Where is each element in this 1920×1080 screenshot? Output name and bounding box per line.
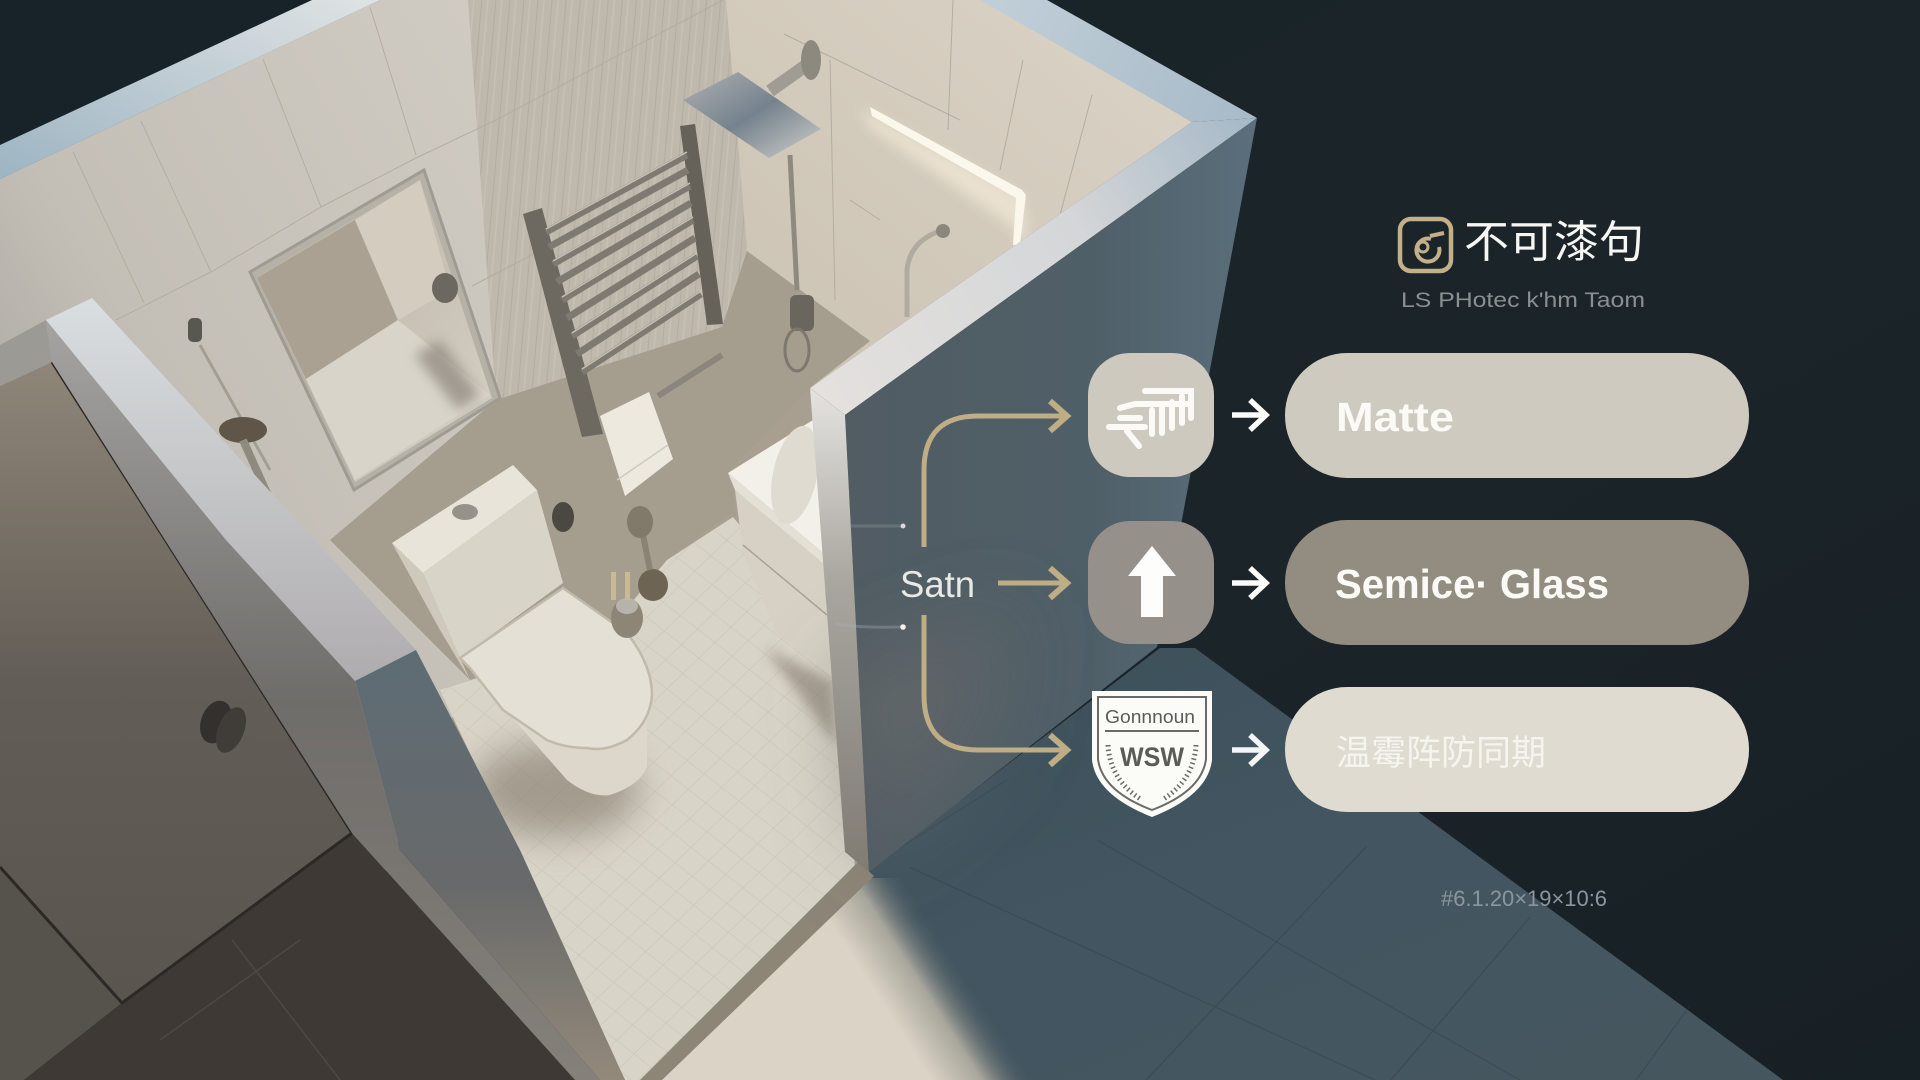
wall face: [845, 118, 1257, 872]
photo: outer floor: [640, 648, 1783, 1080]
vanity: [728, 420, 833, 677]
wall end: [810, 388, 869, 872]
photo: top wall cap: [0, 0, 380, 179]
white arrow 2: [1232, 568, 1266, 598]
pill: matte: Matte: [1336, 394, 1454, 440]
subtitle: LS PHotec k'hm Taom: [1401, 289, 1645, 312]
light slot: [860, 107, 1030, 250]
wall hook and brush: [188, 318, 270, 500]
mirror: [250, 170, 500, 490]
striped feature wall: [468, 0, 747, 400]
icon: up arrow: [1088, 521, 1214, 644]
icon: certification shield: WSW: [1120, 742, 1184, 772]
photo: bathroom interior: [0, 0, 1192, 1080]
icon: paint logo: [1400, 219, 1451, 271]
pill: semi-gloss: [1285, 520, 1749, 645]
towel rail: [523, 124, 723, 437]
lit floor patch: [640, 878, 1040, 1080]
toilet brush and cup: [552, 502, 668, 638]
shower set: [683, 40, 950, 371]
photo: left partition: [46, 298, 625, 1080]
pill: mold resistance: [1285, 687, 1749, 812]
right tiled wall: [726, 0, 1192, 388]
white arrow 3: [1232, 735, 1266, 765]
tile grout lines: [73, 0, 1092, 320]
white arrow 1: [1232, 400, 1266, 430]
lower wall: [330, 251, 870, 680]
door handle: [194, 696, 252, 757]
photo: right wall: [810, 0, 1257, 872]
inner floor: [440, 517, 855, 1080]
pill: mold resistance: 温霉阵防同期: [1336, 734, 1546, 773]
wall cap: [810, 0, 1257, 415]
toilet: [392, 465, 652, 795]
icon: certification shield: Gonnnoun: [1105, 707, 1195, 727]
floor shadows: [470, 648, 836, 838]
footer dimensions: #6.1.20×19×10:6: [1441, 886, 1607, 911]
left tiled wall: [0, 0, 600, 1000]
threshold: [640, 862, 874, 1080]
diagram source label: Satn: [900, 564, 975, 605]
photo: door and left floor: [0, 320, 575, 1080]
gold arrow: to matte: [924, 401, 1067, 547]
gold arrow: to mold resistance: [924, 615, 1067, 765]
pill: semi-gloss: Semice· Glass: [1335, 561, 1609, 607]
title text: 不可漆句: [1464, 218, 1644, 267]
callout dots: [835, 524, 906, 630]
gold arrow: to semi-gloss: [998, 568, 1067, 598]
title group: [1400, 218, 1645, 312]
towel: [600, 392, 673, 496]
pill: matte: [1285, 353, 1749, 478]
icon: certification shield: [1092, 691, 1212, 817]
interior base: [0, 0, 1192, 1080]
icon: matte texture: [1088, 353, 1214, 477]
